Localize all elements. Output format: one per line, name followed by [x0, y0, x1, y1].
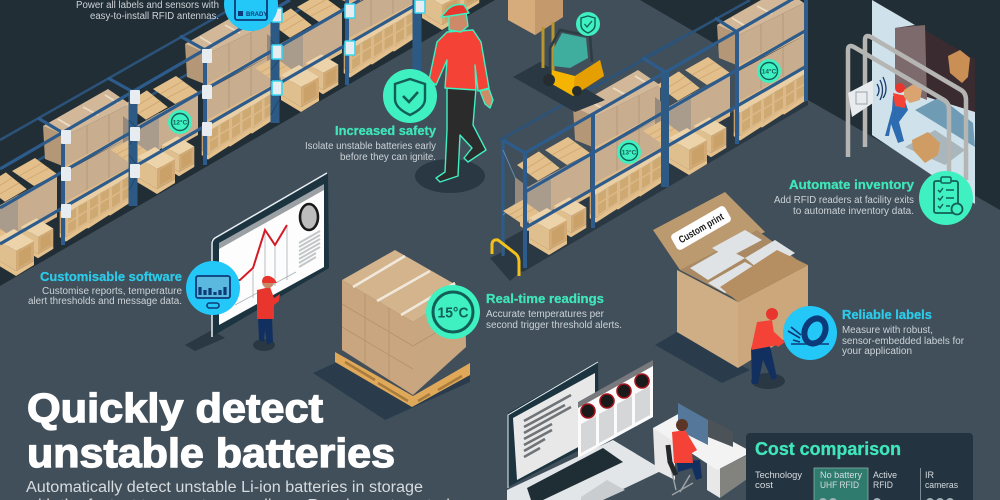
text: real-time readings: Accurate temperatures per: [486, 309, 605, 320]
dark back wall left: [0, 0, 495, 286]
column headers: IR: [925, 469, 934, 480]
subtitle: Automatically detect unstable Li-ion batteries in storage: [26, 479, 423, 496]
bumper shadow: [490, 252, 525, 281]
text: increased safety: [305, 124, 436, 163]
large open box: [653, 192, 808, 383]
column headers: RFID: [873, 479, 893, 490]
icon: software monitor: [186, 261, 240, 315]
text: reliable labels: your application: [842, 346, 912, 357]
text: real-time readings: Real-time readings: [486, 292, 604, 306]
highlighted column: [814, 468, 868, 500]
title: unstable batteries: [27, 430, 395, 476]
text: customisable software: Customisable software: [40, 270, 182, 284]
icon: 15C reading: 15°C: [438, 304, 469, 322]
icon: safety shield: [383, 69, 437, 123]
icon: antenna circle: [224, 0, 278, 31]
icon: forklift shield badge: [576, 12, 600, 36]
IR column divider: [920, 468, 921, 500]
rack shadow right: [505, 70, 808, 272]
yellow bumper: [492, 240, 519, 276]
laptop: [507, 360, 663, 500]
RFID reader: [848, 77, 886, 117]
forklift with box: [508, 0, 605, 112]
icon: clipboard: [919, 171, 973, 225]
column headers: UHF RFID: [820, 479, 859, 490]
text: automate inventory: to automate inventory data.: [793, 206, 914, 217]
temperature badge 13C: 13°C: [622, 148, 637, 156]
large monitor shadow: [185, 330, 225, 351]
RFID exit door: [848, 0, 975, 204]
temperature badge 13C: [617, 140, 641, 164]
text: real-time readings: second trigger threshold alerts.: [486, 320, 622, 331]
text: real-time readings: [486, 292, 622, 331]
cost rating dots: [819, 498, 954, 500]
column headers: Technology: [755, 469, 802, 480]
RFID sensors: [61, 0, 425, 218]
text: customisable software: Customise reports, temperature: [42, 286, 183, 297]
large dashboard display: [211, 173, 329, 337]
icon: antenna circle: BRADY: [246, 12, 267, 18]
icon: 15C reading: [426, 285, 480, 339]
column headers: [755, 469, 958, 490]
text: automate inventory: [774, 178, 914, 217]
text: customisable software: alert thresholds and message data.: [28, 296, 182, 307]
text: reliable labels: [842, 308, 965, 357]
column headers: Active: [873, 469, 897, 480]
title: Quickly detect: [27, 385, 323, 431]
temperature badge 14C: [757, 59, 781, 83]
dark back wall right: [640, 0, 1000, 210]
title: [27, 385, 395, 476]
text: antennas: [76, 0, 219, 22]
column headers: No battery: [820, 469, 862, 480]
worker at display: [253, 276, 280, 351]
temperature badge 12C: 12°C: [173, 118, 188, 126]
text: reliable labels: sensor-embedded labels for: [842, 336, 965, 347]
worker at box: [751, 308, 785, 389]
custom print label: Custom print: [677, 211, 726, 246]
temperature badge 12C: [168, 110, 192, 134]
text: reliable labels: Measure with robust,: [842, 325, 933, 336]
text: reliable labels: Reliable labels: [842, 308, 932, 322]
icon: label tape: [783, 306, 837, 360]
text: increased safety: Increased safety: [335, 124, 436, 138]
worker at door: [885, 83, 922, 143]
line chart: [219, 225, 296, 305]
pallet of boxes: [313, 250, 470, 420]
temperature gauges: [581, 374, 649, 418]
column headers: cameras: [925, 479, 958, 490]
panel: cost comparison: [746, 433, 973, 500]
desk workstation: [653, 403, 752, 498]
column headers: cost: [755, 479, 773, 490]
text: antennas: easy-to-install RFID antennas.: [90, 11, 219, 22]
temperature badge 14C: 14°C: [762, 68, 777, 76]
text: customisable software: [28, 270, 183, 307]
text: automate inventory: Add RFID readers at facility exits: [774, 195, 914, 206]
storage rack right: [500, 0, 807, 268]
text: increased safety: Isolate unstable batteries early: [305, 141, 436, 152]
text: increased safety: before they can ignite.: [340, 152, 436, 163]
text: automate inventory: Automate inventory: [789, 178, 914, 192]
storage rack left: [0, 0, 483, 276]
text: antennas: Power all labels and sensors with: [76, 0, 219, 11]
cost heading: Cost comparison: [755, 439, 901, 459]
walking worker: [415, 4, 493, 193]
